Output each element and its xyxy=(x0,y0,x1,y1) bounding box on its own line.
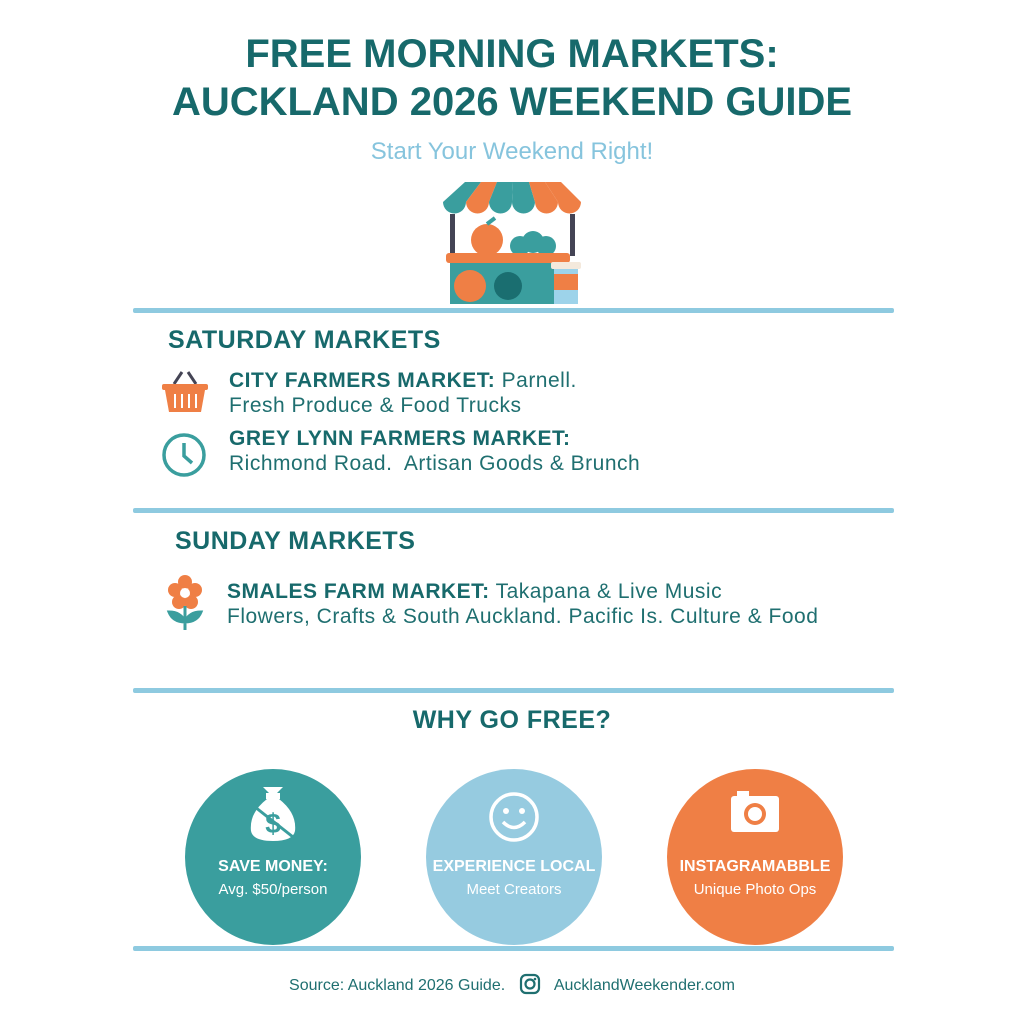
text: smales farm market xyxy=(227,580,818,628)
icon: market stall xyxy=(443,182,581,304)
text: city farmers market: Fresh Produce & Food Trucks xyxy=(229,394,521,417)
heading: why go free: WHY GO FREE? xyxy=(413,706,611,734)
circle: experience local: Meet Creators xyxy=(466,881,562,898)
circle: experience local: EXPERIENCE LOCAL xyxy=(433,858,595,875)
icon: clock xyxy=(162,433,206,477)
icon: flower xyxy=(166,575,204,630)
circle: instagramabble xyxy=(667,769,843,945)
icon: basket xyxy=(162,371,208,412)
text: grey lynn farmers market: Richmond Road. Artisan Goods & Brunch xyxy=(229,452,640,475)
circle: save money: $ xyxy=(265,808,281,839)
circle: instagramabble: INSTAGRAMABBLE xyxy=(680,858,830,875)
circle: save money: SAVE MONEY: xyxy=(218,858,328,875)
title: FREE MORNING MARKETS: xyxy=(245,32,779,76)
circle: experience local xyxy=(426,769,602,945)
title: AUCKLAND 2026 WEEKEND GUIDE xyxy=(172,80,852,124)
circle: save money xyxy=(185,769,361,945)
text: smales farm market: SMALES FARM MARKET: Takapana & Live Music xyxy=(227,580,722,603)
text: grey lynn farmers market xyxy=(229,427,640,475)
heading: sunday markets: SUNDAY MARKETS xyxy=(175,527,415,555)
circle: instagramabble: Unique Photo Ops xyxy=(694,881,816,898)
title xyxy=(172,32,852,124)
text: city farmers market xyxy=(229,369,577,417)
circle: save money: Avg. $50/person xyxy=(218,881,327,898)
footer: Source: Auckland 2026 Guide. AucklandWeekender.com xyxy=(289,977,735,994)
heading: saturday markets: SATURDAY MARKETS xyxy=(168,326,441,354)
subtitle: Start Your Weekend Right! xyxy=(371,138,653,165)
text: grey lynn farmers market: GREY LYNN FARMERS MARKET: xyxy=(229,427,571,450)
text: smales farm market: Flowers, Crafts & South Auckland. Pacific Is. Culture & Food xyxy=(227,605,818,628)
text: city farmers market: CITY FARMERS MARKET: Parnell. xyxy=(229,369,577,392)
